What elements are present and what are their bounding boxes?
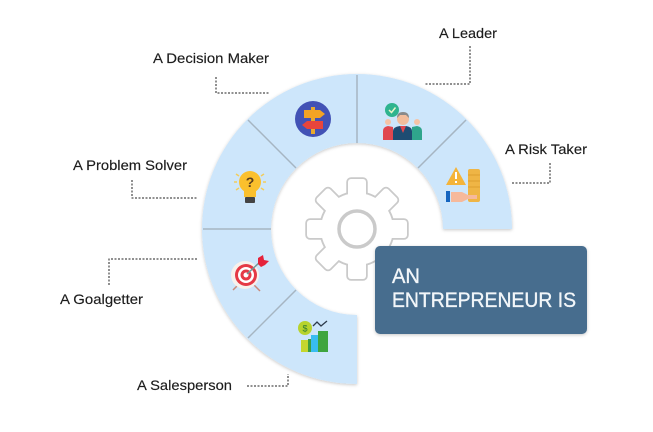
label: a risk taker xyxy=(505,141,587,183)
label: a salesperson: A Salesperson xyxy=(137,377,232,393)
label: a risk taker: A Risk Taker xyxy=(505,141,587,157)
label: a problem solver xyxy=(73,157,198,198)
callout: an entrepreneur is: ENTREPRENEUR IS xyxy=(392,289,576,312)
label: a decision maker xyxy=(153,50,270,93)
icon: gear xyxy=(307,179,407,279)
label: a goalgetter: A Goalgetter xyxy=(60,291,143,307)
callout: an entrepreneur is: AN xyxy=(392,265,420,288)
icon: leader with team xyxy=(383,103,422,140)
icon: signpost xyxy=(295,101,331,137)
label: a salesperson xyxy=(137,374,288,393)
icon: light bulb idea: ? xyxy=(246,174,254,190)
icon: sales growth chart: $ xyxy=(302,324,308,334)
label: a decision maker: A Decision Maker xyxy=(153,50,269,66)
label: a goalgetter xyxy=(60,259,197,307)
icon: risk warning and coins xyxy=(446,167,480,202)
label: a leader: A Leader xyxy=(439,25,497,41)
icon: sales growth chart xyxy=(298,321,328,352)
label: a problem solver: A Problem Solver xyxy=(73,157,187,173)
icon: target with arrow xyxy=(231,255,269,291)
callout: an entrepreneur is xyxy=(375,246,587,334)
label: a leader xyxy=(424,25,497,84)
icon: light bulb idea xyxy=(234,171,266,203)
ring of six segments xyxy=(202,74,512,384)
